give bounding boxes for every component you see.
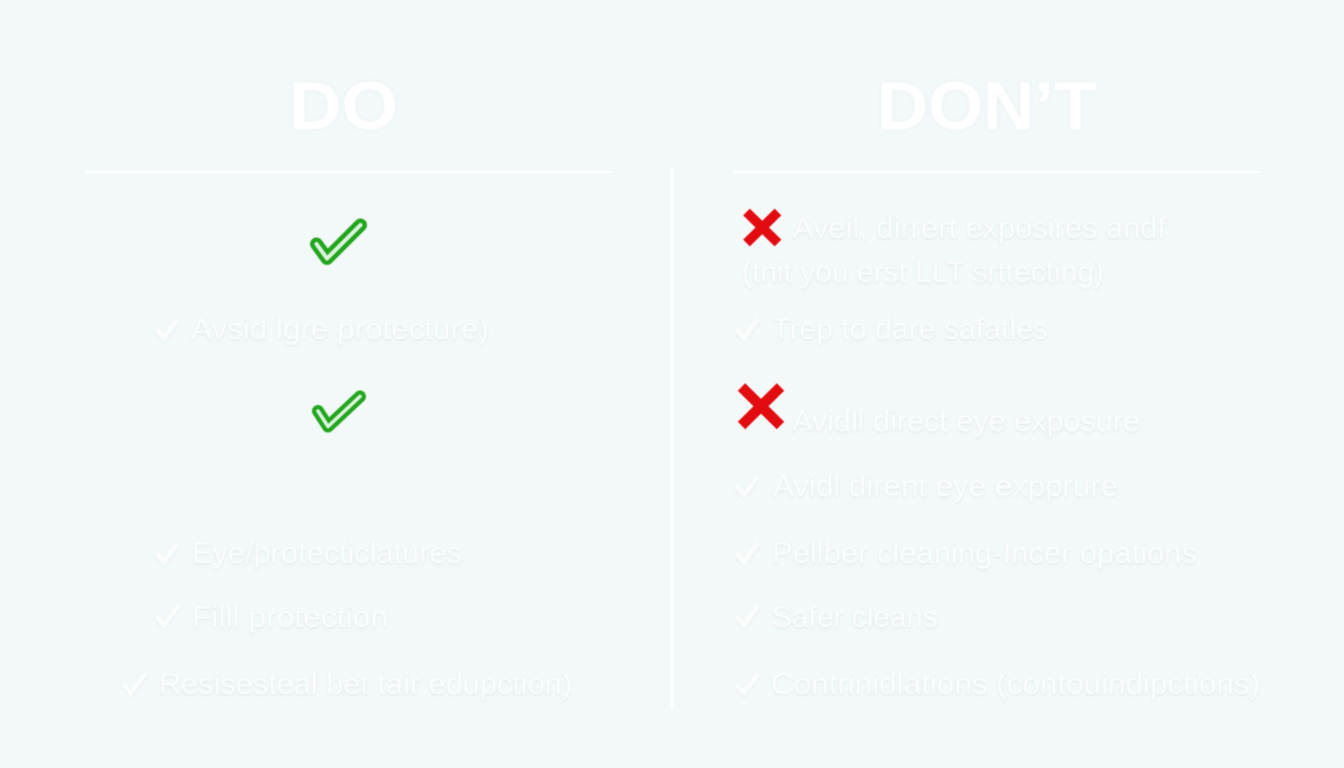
item: Avidll direct eye exposure: Avidll direct eye exposure: [792, 405, 1140, 438]
item: Fill protection: Filll protection: [192, 601, 388, 634]
heading: DO: DO: [289, 68, 398, 144]
item: Aveil, dirrert exposires andf: Aveil, dirrert exposires andf: [793, 212, 1167, 245]
item: Avsid lgre protecture): Avsid lgre protecture): [191, 313, 489, 346]
item: Pellber cleaning-lncer opations: Pellber cleaning-Incer opations: [772, 537, 1197, 570]
icon: red cross 1: [746, 212, 778, 243]
icon: green check 1: [316, 225, 360, 258]
panel: don't column: [736, 68, 1260, 701]
item: Eye/protecticlatures: Eye/protecticlatures: [192, 537, 462, 570]
item: Safer cleans: Safer cleans: [772, 601, 938, 634]
heading: DON'T: DON’T: [877, 68, 1097, 144]
item: Resisesteal bet tair edupction): Resisesteal bet tair edupction): [159, 668, 572, 701]
panel: do column: [123, 68, 572, 701]
item: (tnit you erst LLT srttecting): (tnit you erst LLT srttecting): [742, 256, 1104, 289]
item: Trep to dare safatles: Trep to dare safatles: [772, 313, 1048, 346]
icon: green check 2: [318, 396, 360, 426]
item: Avidl dirent eye exprure: Avidl dirent eye expprure: [773, 470, 1118, 503]
item: Contrinidlations (contouindipctions): Contrinidlations (contouindipctions): [771, 668, 1260, 701]
icon: red cross 2: [742, 387, 780, 426]
